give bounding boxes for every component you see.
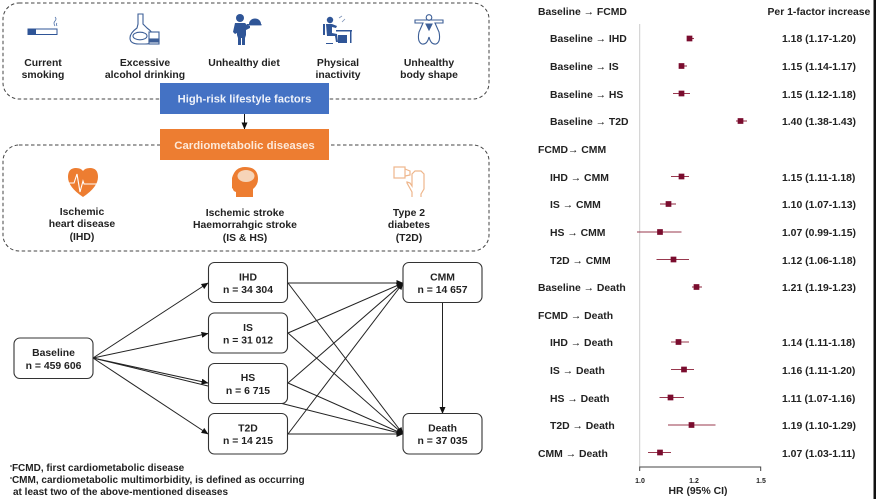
- node: IHD: [208, 262, 288, 302]
- row: Baseline to Death: [538, 283, 856, 294]
- footnotes: at least two of the above-mentioned diseases: [13, 487, 228, 498]
- node: HS: [208, 364, 288, 404]
- right edge strip: [874, 0, 876, 499]
- icon: body shape: [415, 15, 443, 44]
- heading box: cardiometabolic diseases: [160, 129, 329, 160]
- label: type 2 diabetes: (T2D): [396, 233, 422, 244]
- section label: FCMD to CMM: FCMD→ CMM: [538, 145, 606, 156]
- label: current smoking: smoking: [22, 70, 64, 81]
- node: T2D: T2D: [238, 424, 258, 434]
- node: baseline: n = 459 606: [26, 361, 82, 372]
- row: IHD to Death: 1.14 (1.11-1.18): [782, 338, 855, 349]
- arrows: flow connections: [93, 283, 442, 434]
- label: ischemic heart disease: [49, 207, 115, 243]
- row: T2D to CMM: 1.12 (1.06-1.18): [782, 256, 856, 267]
- label: physical inactivity: Physical: [317, 58, 359, 69]
- label: physical inactivity: [315, 58, 361, 81]
- heading box: high-risk lifestyle factors: High-risk lifestyle factors: [178, 94, 311, 106]
- axis: hazard ratio: [635, 467, 766, 497]
- row: Baseline to IHD: Baseline → IHD: [550, 34, 627, 45]
- node: IHD: IHD: [239, 272, 257, 284]
- row: CMM to Death: CMM → Death: [538, 449, 608, 460]
- row: Baseline to IHD: 1.18 (1.17-1.20): [782, 34, 856, 45]
- row: IHD to Death: [550, 338, 855, 349]
- column header: comparison: Baseline → FCMD: [538, 7, 627, 18]
- node: CMM: [403, 262, 482, 302]
- node: CMM: n = 14 657: [418, 285, 468, 296]
- row: HS to CMM: 1.07 (0.99-1.15): [782, 228, 856, 239]
- label: stroke types: Haemorrahgic stroke: [193, 220, 297, 231]
- footnotes: [10, 463, 305, 498]
- panel: high-risk lifestyle factors: [3, 3, 489, 99]
- row: HS to Death: [550, 394, 855, 405]
- icon: head with brain: [232, 167, 258, 197]
- label: ischemic heart disease: heart disease: [49, 219, 115, 230]
- node: death: n = 37 035: [418, 436, 468, 447]
- label: physical inactivity: inactivity: [315, 70, 361, 81]
- node: HS: n = 6 715: [226, 386, 270, 397]
- panel: cardiometabolic diseases: [3, 145, 489, 251]
- label: excessive alcohol drinking: Excessive: [120, 58, 170, 69]
- row: Baseline to IHD: [550, 34, 856, 45]
- node: death: Death: [428, 424, 457, 434]
- row: Baseline to Death: Baseline → Death: [538, 283, 626, 294]
- row: IS to CMM: [550, 200, 856, 211]
- row: IHD to CMM: IHD → CMM: [550, 173, 609, 184]
- label: ischemic heart disease: (IHD): [70, 232, 94, 243]
- row: IS to CMM: IS → CMM: [550, 200, 601, 211]
- label: unhealthy body shape: [400, 58, 458, 81]
- label: unhealthy diet: Unhealthy diet: [208, 58, 280, 69]
- node: IHD: n = 34 304: [223, 285, 273, 296]
- footnotes: FCMD, first cardiometabolic disease: [12, 463, 185, 474]
- footnotes: *: [10, 477, 12, 483]
- label: excessive alcohol drinking: alcohol drinking: [105, 70, 185, 81]
- row: IS to CMM: 1.10 (1.07-1.13): [782, 200, 856, 211]
- label: unhealthy body shape: Unhealthy: [404, 58, 454, 69]
- row: Baseline to T2D: [550, 117, 856, 128]
- row: T2D to Death: [550, 421, 856, 432]
- row: Baseline to HS: 1.15 (1.12-1.18): [782, 90, 856, 101]
- node: CMM: CMM: [430, 272, 455, 284]
- label: stroke types: [193, 208, 297, 244]
- axis: hazard ratio: HR (95% CI): [669, 486, 727, 497]
- arrow: lifestyle to diseases: [244, 114, 246, 129]
- label: type 2 diabetes: Type 2: [393, 208, 425, 219]
- row: Baseline to HS: Baseline → HS: [550, 90, 623, 101]
- node: death: [403, 414, 482, 454]
- row: HS to CMM: [550, 228, 856, 239]
- label: unhealthy body shape: body shape: [400, 70, 458, 81]
- icon: heart with pulse: [67, 168, 98, 197]
- axis: hazard ratio: 1.0: [635, 478, 645, 485]
- column header: effect: Per 1-factor increase: [768, 7, 871, 18]
- row: IHD to CMM: [550, 173, 855, 184]
- row: HS to Death: 1.11 (1.07-1.16): [782, 394, 855, 405]
- section label: FCMD to Death: FCMD → Death: [538, 311, 613, 322]
- row: Baseline to IS: Baseline → IS: [550, 62, 619, 73]
- row: CMM to Death: [538, 449, 855, 460]
- row: Baseline to T2D: 1.40 (1.38-1.43): [782, 117, 856, 128]
- footnotes: CMM, cardiometabolic multimorbidity, is defined as occurring: [12, 475, 305, 486]
- row: Baseline to IS: [550, 62, 856, 73]
- node: IS: [208, 313, 288, 353]
- label: type 2 diabetes: [388, 208, 430, 244]
- row: IHD to CMM: 1.15 (1.11-1.18): [782, 173, 855, 184]
- node: T2D: n = 14 215: [223, 436, 273, 447]
- heading box: cardiometabolic diseases: Cardiometabolic diseases: [174, 140, 315, 152]
- forest plot: [538, 7, 871, 497]
- row: Baseline to HS: [550, 90, 856, 101]
- row: HS to Death: HS → Death: [550, 394, 609, 405]
- footnotes: *: [10, 465, 12, 471]
- row: IS to Death: 1.16 (1.11-1.20): [782, 366, 855, 377]
- row: T2D to Death: 1.19 (1.10-1.29): [782, 421, 856, 432]
- node: baseline: [14, 338, 93, 378]
- row: IS to Death: IS → Death: [550, 366, 605, 377]
- icon: cigarette: [28, 17, 57, 34]
- label: stroke types: (IS & HS): [223, 233, 267, 244]
- reference line: [639, 24, 641, 467]
- row: T2D to Death: T2D → Death: [550, 421, 615, 432]
- node: IS: n = 31 012: [223, 336, 273, 346]
- row: IS to Death: [550, 366, 855, 377]
- node: T2D: [208, 414, 288, 454]
- row: HS to CMM: HS → CMM: [550, 228, 605, 239]
- axis: hazard ratio: 1.5: [756, 478, 766, 485]
- icon: hand with glucose meter: [394, 167, 424, 197]
- axis: hazard ratio: 1.2: [689, 478, 699, 485]
- node: IS: IS: [243, 323, 253, 334]
- label: excessive alcohol drinking: [105, 58, 185, 81]
- label: current smoking: Current: [24, 58, 62, 69]
- row: Baseline to T2D: Baseline → T2D: [550, 117, 629, 128]
- icon: waiter: [233, 14, 262, 45]
- icon: desk worker: [323, 16, 352, 44]
- row: Baseline to IS: 1.15 (1.14-1.17): [782, 62, 856, 73]
- row: IHD to Death: IHD → Death: [550, 338, 613, 349]
- icon: bottle and glass: [130, 14, 159, 44]
- label: current smoking: [22, 58, 64, 81]
- node: HS: HS: [241, 373, 255, 384]
- node: baseline: Baseline: [32, 348, 75, 359]
- row: CMM to Death: 1.07 (1.03-1.11): [782, 449, 855, 460]
- row: Baseline to Death: 1.21 (1.19-1.23): [782, 283, 856, 294]
- label: ischemic heart disease: Ischemic: [60, 207, 104, 218]
- row: T2D to CMM: [550, 256, 856, 267]
- row: T2D to CMM: T2D → CMM: [550, 256, 611, 267]
- label: stroke types: Ischemic stroke: [206, 208, 284, 219]
- heading box: high-risk lifestyle factors: [160, 83, 329, 114]
- flow diagram: [14, 262, 482, 454]
- label: type 2 diabetes: diabetes: [388, 220, 430, 231]
